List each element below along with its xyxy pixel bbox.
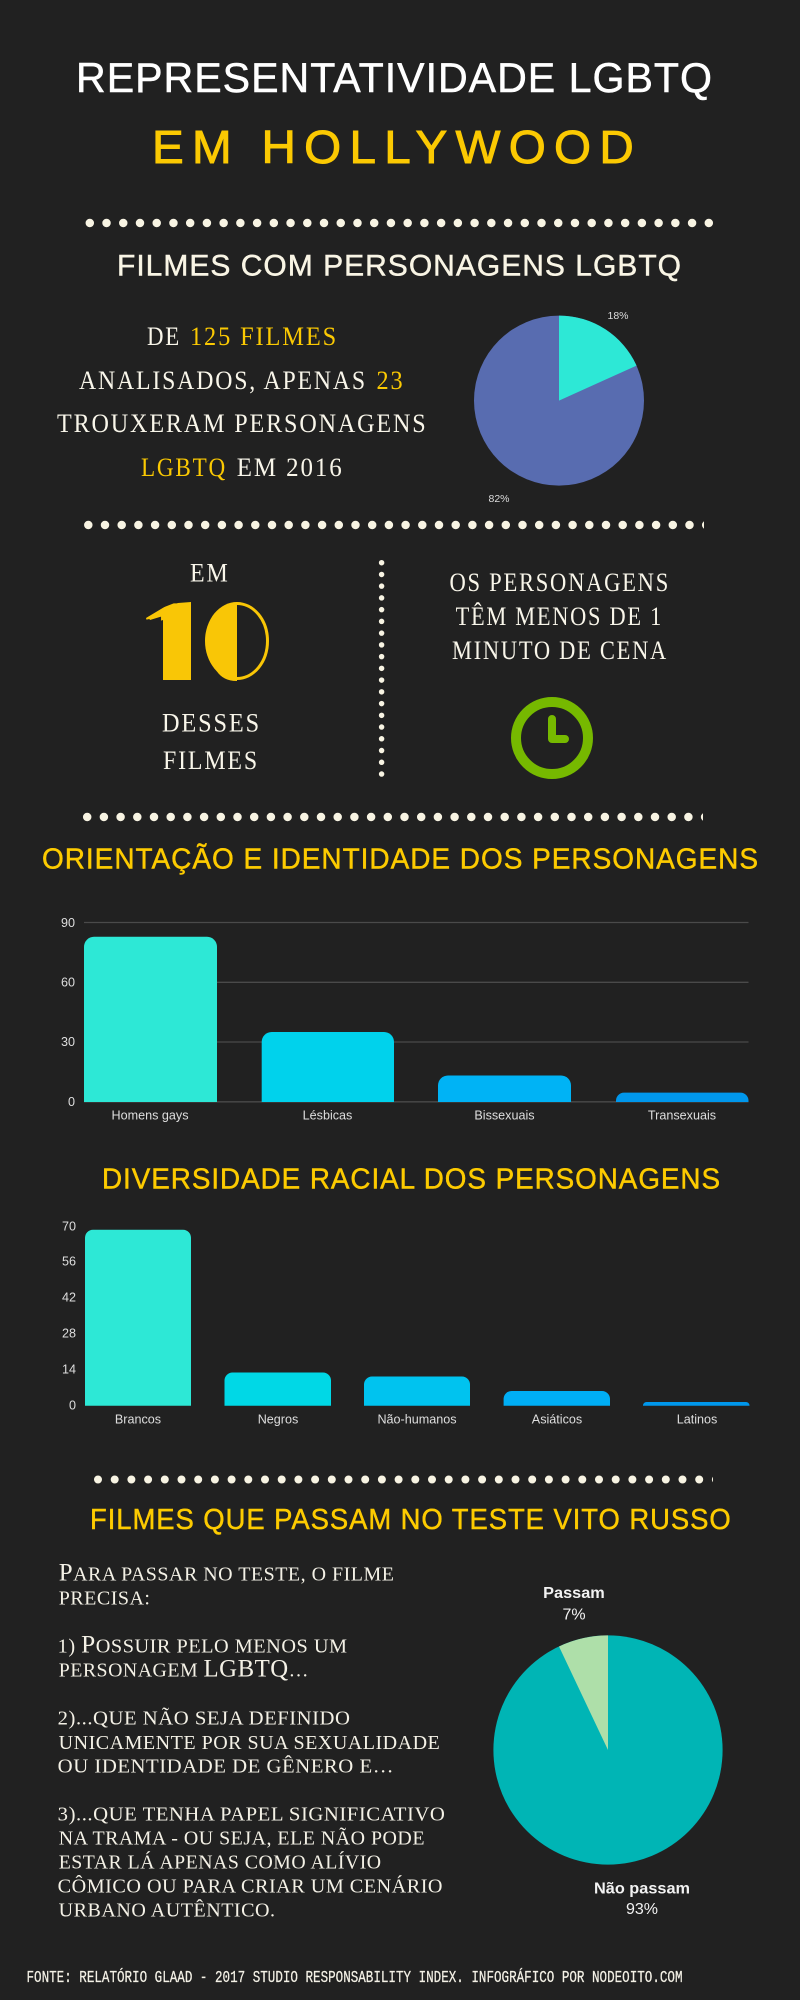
big number 10 bbox=[146, 602, 269, 681]
pie chart: teste vito russo: 7% bbox=[562, 1606, 586, 1623]
text block: regras do teste: PRECISA: bbox=[59, 1588, 151, 1610]
bar chart: orientacao: 90 bbox=[61, 916, 75, 930]
pie chart: 18% / 82%: 82% bbox=[488, 493, 510, 505]
text block: menos de 1 minuto: MINUTO DE CENA bbox=[452, 636, 668, 665]
bar chart: diversidade: 56 bbox=[62, 1254, 76, 1268]
bar chart: orientacao: 60 bbox=[61, 976, 75, 990]
pie chart: teste vito russo bbox=[493, 1585, 723, 1918]
title: REPRESENTATIVIDADE LGBTQ bbox=[76, 54, 713, 101]
text block: regras do teste: PARA PASSAR NO TESTE, O FILME bbox=[59, 1560, 394, 1586]
bar chart: orientacao: Homens gays bbox=[112, 1108, 188, 1122]
heading: diversidade: DIVERSIDADE RACIAL DOS PERSONAGENS bbox=[102, 1164, 721, 1196]
heading: filmes com personagens: FILMES COM PERSONAGENS LGBTQ bbox=[117, 250, 682, 282]
bar chart: orientacao: 30 bbox=[61, 1035, 75, 1049]
big number 10: 0 bbox=[205, 578, 269, 706]
bar chart: orientacao: 0 bbox=[68, 1095, 75, 1109]
text block: regras do teste: UNICAMENTE POR SUA SEXUALIDADE bbox=[59, 1732, 440, 1754]
text block: menos de 1 minuto bbox=[450, 568, 670, 665]
text block: regras do teste: CÔMICO OU PARA CRIAR UM CENÁRIO bbox=[58, 1874, 443, 1898]
text block: regras do teste: NA TRAMA - OU SEJA, ELE NÃO PODE bbox=[59, 1826, 425, 1850]
text block: 125 filmes: 125 FILMES bbox=[190, 322, 338, 351]
bar chart: orientacao: Lésbicas bbox=[303, 1108, 352, 1122]
bar chart: diversidade: 0 bbox=[69, 1398, 76, 1412]
bar chart: diversidade: 42 bbox=[62, 1290, 76, 1304]
bar chart: diversidade: 14 bbox=[62, 1362, 76, 1376]
bar chart: orientacao bbox=[61, 916, 748, 1122]
stat: em 10 desses filmes bbox=[146, 564, 269, 770]
text block: 125 filmes: ANALISADOS, APENAS bbox=[79, 366, 367, 395]
bar chart: orientacao: Bissexuais bbox=[474, 1108, 535, 1122]
text block: 125 filmes: TROUXERAM PERSONAGENS bbox=[57, 409, 428, 438]
pie chart: 18% / 82% bbox=[474, 310, 644, 505]
text block: 125 filmes: DE bbox=[147, 322, 181, 351]
icon: clock bbox=[516, 702, 588, 774]
stat: em 10 desses filmes: EM bbox=[190, 559, 230, 588]
bar chart: diversidade: Não-humanos bbox=[377, 1412, 457, 1426]
bar chart: diversidade bbox=[62, 1220, 750, 1426]
heading: vito russo: FILMES QUE PASSAM NO TESTE VITO RUSSO bbox=[90, 1504, 732, 1536]
text block: 125 filmes bbox=[57, 322, 428, 482]
text block: 125 filmes: LGBTQ bbox=[141, 453, 227, 482]
text block: regras do teste: OU IDENTIDADE DE GÊNERO E… bbox=[58, 1755, 394, 1778]
text block: regras do teste: URBANO AUTÊNTICO. bbox=[59, 1898, 276, 1922]
text block: menos de 1 minuto: OS PERSONAGENS bbox=[450, 568, 670, 597]
big number 10: 1 bbox=[127, 578, 215, 706]
bar chart: diversidade: 70 bbox=[62, 1220, 76, 1234]
text block: regras do teste: 3)...QUE TENHA PAPEL SIGNIFICATIVO bbox=[58, 1804, 445, 1826]
bar chart: orientacao: Transexuais bbox=[648, 1108, 716, 1122]
heading: orientacao: ORIENTAÇÃO E IDENTIDADE DOS PERSONAGENS bbox=[42, 842, 759, 876]
title bbox=[76, 54, 713, 173]
bar chart: diversidade: Latinos bbox=[677, 1412, 717, 1426]
pie chart: teste vito russo: 93% bbox=[626, 1901, 658, 1918]
bar chart: diversidade: Negros bbox=[258, 1412, 298, 1426]
stat: em 10 desses filmes: DESSES bbox=[162, 709, 261, 738]
bar chart: diversidade: 28 bbox=[62, 1326, 76, 1340]
pie chart: 18% / 82%: 18% bbox=[607, 310, 629, 322]
text block: regras do teste: PERSONAGEM LGBTQ… bbox=[59, 1656, 309, 1683]
text block: regras do teste: 2)...QUE NÃO SEJA DEFINIDO bbox=[58, 1706, 351, 1730]
bar chart: diversidade: Asiáticos bbox=[532, 1412, 582, 1426]
bar chart: diversidade: Brancos bbox=[115, 1412, 161, 1426]
text block: regras do teste: 1) POSSUIR PELO MENOS UM bbox=[58, 1632, 347, 1659]
title: EM HOLLYWOOD bbox=[152, 121, 642, 173]
text block: regras do teste bbox=[58, 1560, 445, 1922]
stat: em 10 desses filmes: FILMES bbox=[163, 746, 259, 775]
pie chart: teste vito russo: Não passam bbox=[594, 1881, 690, 1898]
text block: regras do teste: ESTAR LÁ APENAS COMO ALÍVIO bbox=[59, 1850, 382, 1873]
text block: 125 filmes: 23 bbox=[376, 366, 404, 395]
text block: 125 filmes: EM 2016 bbox=[237, 453, 344, 482]
pie chart: teste vito russo: Passam bbox=[543, 1585, 605, 1602]
text block: menos de 1 minuto: TÊM MENOS DE 1 bbox=[456, 602, 663, 631]
